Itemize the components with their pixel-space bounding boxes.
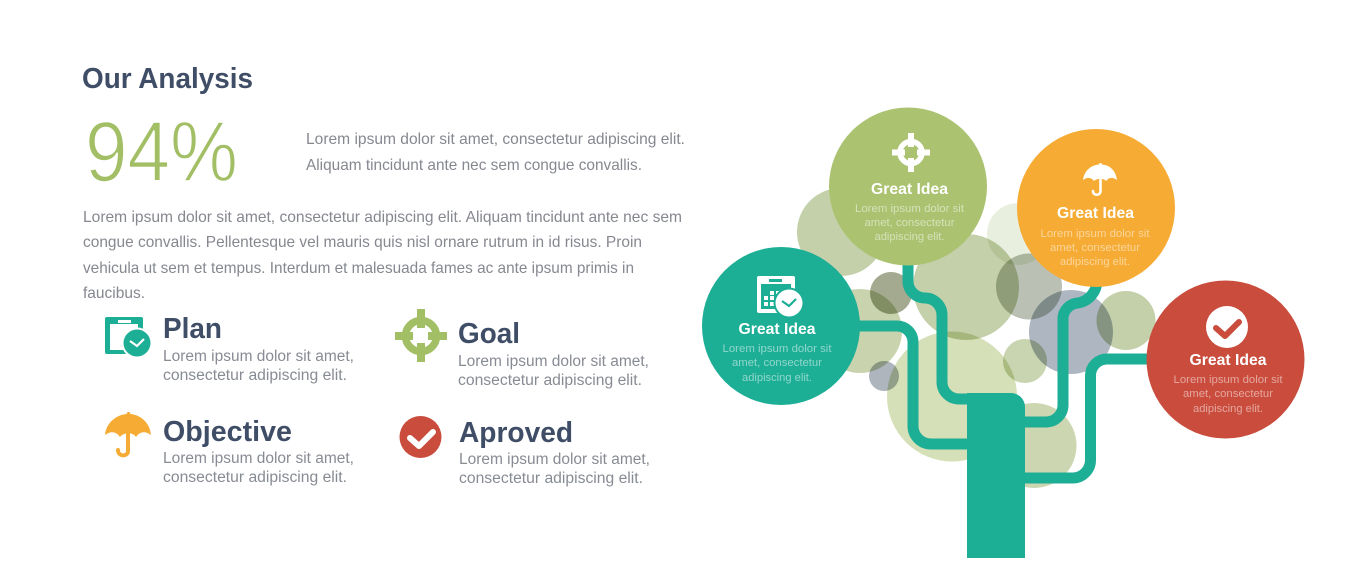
statistic description <box>306 131 685 174</box>
item: Plan: Plan <box>163 313 222 345</box>
item: Aproved: Aproved <box>459 417 573 449</box>
node: red idea <box>1146 280 1304 438</box>
node: orange idea: adipiscing elit. <box>1060 256 1130 268</box>
statistic description: Lorem ipsum dolor sit amet, consectetur adipiscing elit. <box>306 131 685 148</box>
icon: umbrella <box>105 412 151 455</box>
node: red idea: amet, consectetur <box>1183 388 1273 400</box>
item: Plan: Lorem ipsum dolor sit amet, <box>163 348 354 365</box>
node: green idea: Lorem ipsum dolor sit <box>855 203 964 215</box>
node: orange idea <box>1017 129 1175 287</box>
tree foliage circles <box>797 188 1156 488</box>
icon: target <box>892 133 930 172</box>
node: teal idea: amet, consectetur <box>732 357 822 369</box>
icon: calendar with clock <box>757 276 804 318</box>
tree trunk <box>967 393 1025 558</box>
tree branches <box>850 258 1155 478</box>
item: Objective: consectetur adipiscing elit. <box>163 469 347 486</box>
node: green idea: amet, consectetur <box>864 217 955 229</box>
body paragraph: faucibus. <box>83 285 145 302</box>
icon: check badge <box>1206 306 1248 348</box>
item: Aproved: consectetur adipiscing elit. <box>459 470 643 487</box>
item: Objective: Objective <box>163 416 292 448</box>
item: Objective <box>105 412 354 486</box>
node: orange idea: Lorem ipsum dolor sit <box>1040 228 1150 240</box>
node: teal idea <box>702 247 860 405</box>
item: Plan <box>105 313 354 384</box>
node: green idea: adipiscing elit. <box>874 231 944 243</box>
body paragraph: Lorem ipsum dolor sit amet, consectetur adipiscing elit. Aliquam tincidunt ante nec sem <box>83 209 682 226</box>
chart: idea tree <box>702 108 1304 558</box>
panel: analysis text <box>82 63 685 302</box>
item: Objective: Lorem ipsum dolor sit amet, <box>163 450 354 467</box>
node: red idea: Lorem ipsum dolor sit <box>1174 374 1282 386</box>
statistic description: Aliquam tincidunt ante nec sem congue convallis. <box>306 157 642 174</box>
item: Goal: Goal <box>458 318 520 350</box>
node: teal idea: Great Idea <box>738 321 816 338</box>
item: Aproved <box>400 416 650 487</box>
icon: calendar with clock <box>105 317 152 358</box>
body paragraph <box>83 209 682 302</box>
node: green idea <box>829 108 987 266</box>
icon: check badge <box>400 416 442 458</box>
node: orange idea: amet, consectetur <box>1050 242 1140 254</box>
title: Our Analysis <box>82 63 253 95</box>
node: green idea: Great Idea <box>871 181 948 198</box>
item: Goal <box>395 309 649 389</box>
item: Aproved: Lorem ipsum dolor sit amet, <box>459 451 650 468</box>
node: teal idea: Lorem ipsum dolor sit <box>722 343 832 355</box>
body paragraph: vehicula ut sem et tempus. Interdum et malesuada fames ac ante ipsum primis in <box>83 260 634 277</box>
item: Plan: consectetur adipiscing elit. <box>163 367 347 384</box>
big statistic 94%: 94% <box>85 105 238 200</box>
node: orange idea: Great Idea <box>1057 205 1134 222</box>
icon: target <box>395 309 447 362</box>
item: Goal: Lorem ipsum dolor sit amet, <box>458 353 649 370</box>
body paragraph: congue convallis. Pellentesque vel mauris quis nisl ornare rutrum in id risus. Proin <box>83 234 642 251</box>
item: Goal: consectetur adipiscing elit. <box>458 372 642 389</box>
node: red idea: adipiscing elit. <box>1193 403 1263 415</box>
node: red idea: Great Idea <box>1190 352 1267 369</box>
icon: umbrella <box>1083 163 1117 195</box>
node: teal idea: adipiscing elit. <box>742 372 812 384</box>
